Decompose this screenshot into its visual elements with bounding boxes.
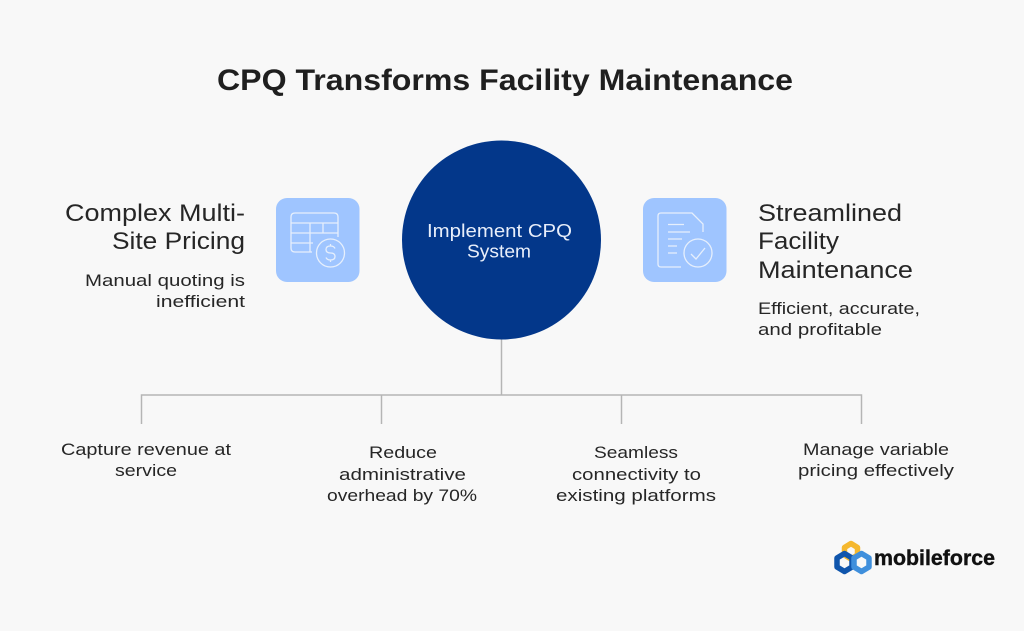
outcome: seamless connectivity — [556, 443, 716, 505]
icon: document with check mark — [643, 198, 726, 282]
outcome: seamless connectivity: connectivity to — [572, 465, 701, 484]
outcome: capture revenue — [61, 440, 231, 480]
outcome: reduce overhead — [327, 443, 477, 505]
outcome: capture revenue: Capture revenue at — [61, 440, 231, 459]
left text: complex multi-site pricing: Complex Multi- — [65, 200, 245, 227]
central circle: implement CPQ system: Implement CPQ — [427, 221, 572, 241]
left text: complex multi-site pricing: inefficient — [156, 292, 245, 311]
right text: streamlined facility maintenance: Facility — [758, 228, 839, 255]
connector tree — [142, 338, 862, 424]
outcome: reduce overhead: Reduce — [369, 443, 437, 462]
central circle: implement CPQ system: System — [467, 242, 531, 262]
central circle: implement CPQ system — [402, 140, 601, 340]
outcome: variable pricing — [798, 440, 955, 480]
outcome: seamless connectivity: existing platforms — [556, 486, 716, 505]
right text: streamlined facility maintenance: Streamlined — [758, 200, 902, 227]
logo: mobileforce — [837, 544, 995, 572]
right text: streamlined facility maintenance — [758, 200, 920, 339]
right text: streamlined facility maintenance: and profitable — [758, 320, 882, 339]
logo: mobileforce: mobileforce — [874, 547, 995, 570]
title: CPQ Transforms Facility Maintenance — [217, 64, 793, 97]
outcome: variable pricing: pricing effectively — [798, 461, 955, 480]
outcome: reduce overhead: overhead by 70% — [327, 486, 477, 505]
left text: complex multi-site pricing: Manual quoting is — [85, 271, 245, 290]
outcome: seamless connectivity: Seamless — [594, 443, 678, 462]
outcome: reduce overhead: administrative — [339, 465, 466, 484]
icon: pricing table with dollar coin — [276, 198, 360, 282]
left text: complex multi-site pricing — [65, 200, 245, 311]
left text: complex multi-site pricing: Site Pricing — [112, 228, 245, 255]
right text: streamlined facility maintenance: Efficient, accurate, — [758, 299, 920, 318]
outcome: variable pricing: Manage variable — [803, 440, 949, 459]
right text: streamlined facility maintenance: Maintenance — [758, 257, 913, 284]
outcome: capture revenue: service — [115, 461, 177, 480]
